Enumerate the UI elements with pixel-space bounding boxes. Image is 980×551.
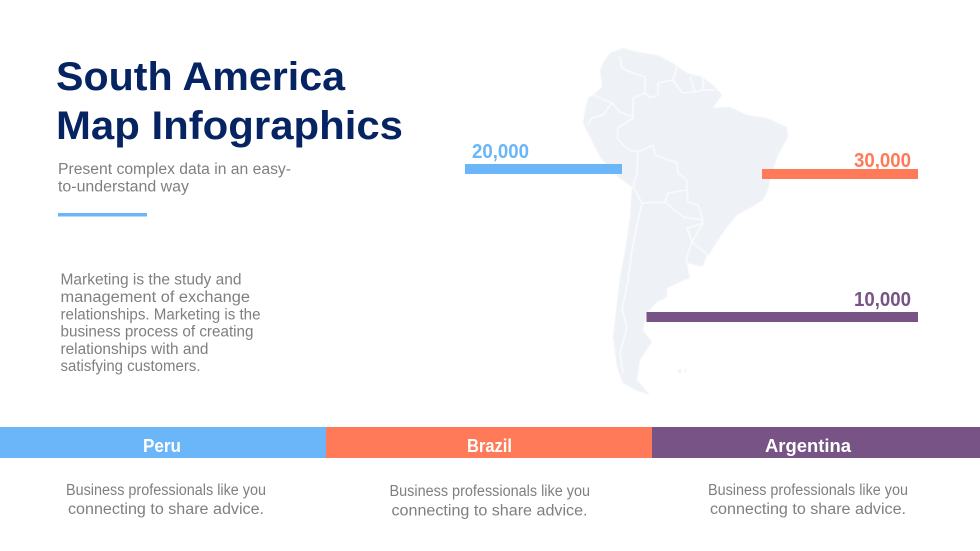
panel: Brazil [326, 427, 652, 520]
panel: Brazil: Business professionals like you [390, 483, 590, 500]
map: country borders [588, 57, 715, 373]
title: Map Infographics [56, 104, 403, 148]
panel: Argentina [652, 427, 980, 518]
body paragraph: Marketing is the study and [60, 272, 242, 288]
body paragraph: satisfying customers. [60, 358, 200, 375]
callout: Brazil value bar: 30,000 [854, 150, 911, 172]
panel: Argentina: connecting to share advice. [710, 501, 906, 518]
panel: Argentina: Business professionals like you [708, 482, 908, 499]
callout: Peru value bar: 20,000 [472, 141, 529, 163]
accent underline [58, 213, 147, 216]
callout: Argentina value bar: 10,000 [854, 289, 911, 311]
callout: Peru value bar [465, 141, 622, 174]
body paragraph [60, 272, 260, 375]
body paragraph: relationships with and [60, 341, 208, 358]
subtitle: to-understand way [58, 178, 189, 196]
panel: Argentina: Argentina [765, 436, 852, 456]
subtitle: Present complex data in an easy- [58, 161, 291, 178]
body paragraph: management of exchange [60, 289, 250, 306]
body paragraph: business process of creating [60, 324, 254, 340]
panel: Brazil: Brazil [467, 436, 512, 456]
callout: Brazil value bar [762, 150, 918, 179]
map: South America [583, 48, 788, 395]
panel: Brazil: connecting to share advice. [392, 502, 588, 520]
subtitle [58, 161, 291, 196]
panel: Peru [0, 427, 326, 518]
callout: Argentina value bar [646, 289, 918, 322]
panel: Peru: connecting to share advice. [68, 501, 264, 518]
title: South America [56, 55, 346, 99]
body paragraph: relationships. Marketing is the [60, 306, 260, 324]
map: Falkland islands [678, 369, 687, 373]
title [56, 55, 403, 148]
panel: Peru: Business professionals like you [66, 482, 266, 499]
panel: Peru: Peru [143, 436, 181, 456]
